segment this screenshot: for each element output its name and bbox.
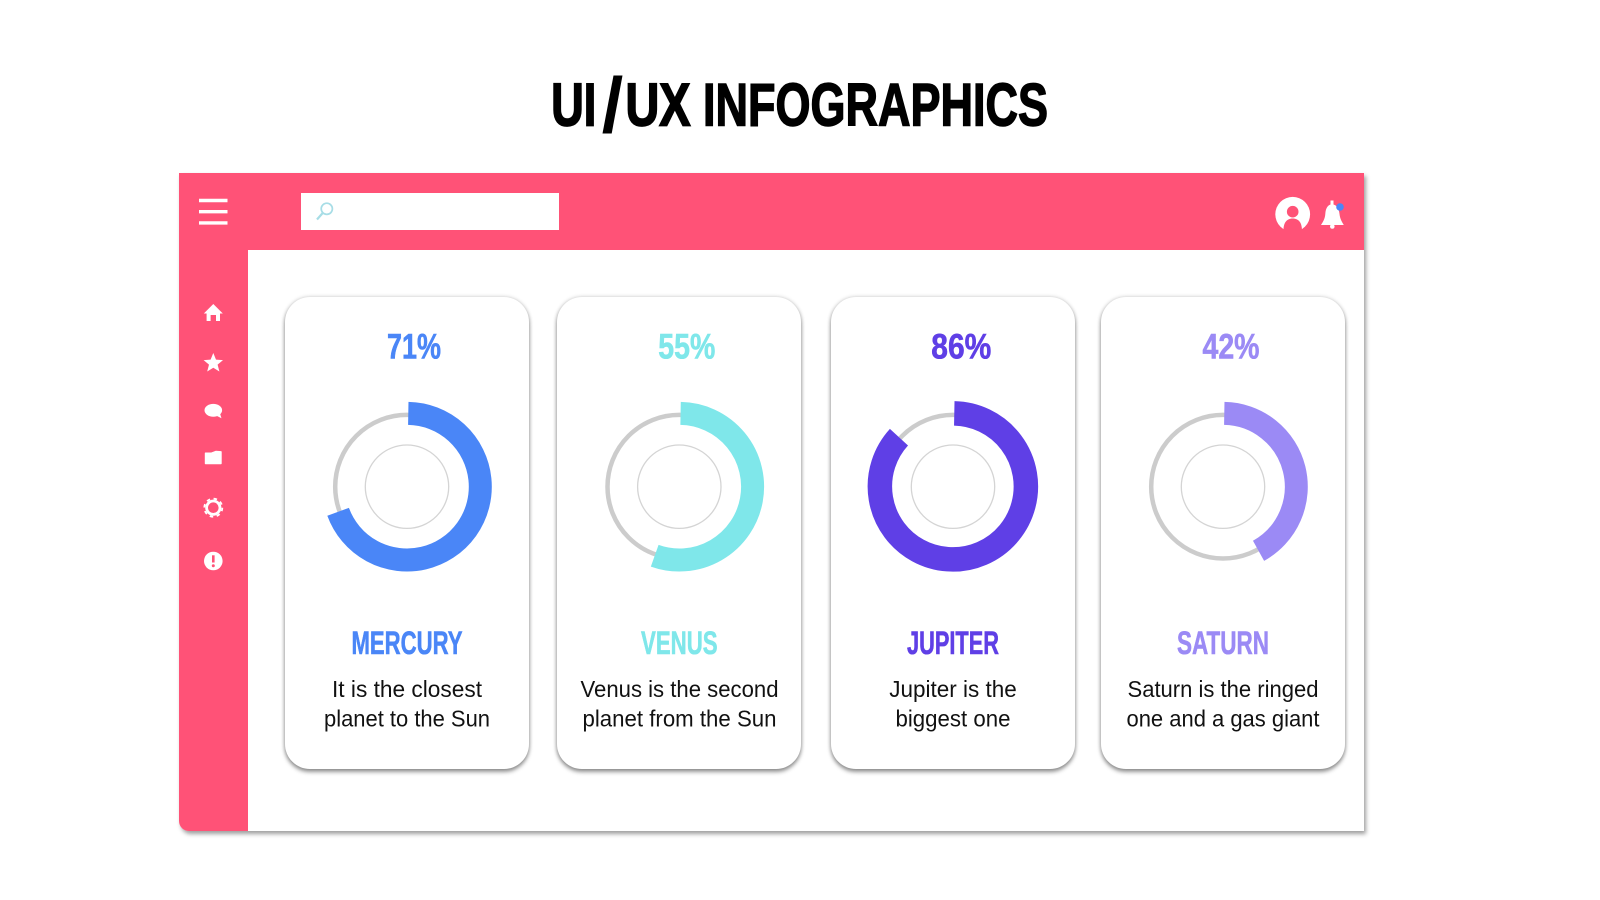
Saturn name: SATURN xyxy=(1177,625,1269,661)
Saturn description: Saturn is the ringed xyxy=(1128,676,1319,702)
Jupiter description: biggest one xyxy=(895,706,1010,732)
Saturn donut chart xyxy=(1151,413,1297,558)
search box xyxy=(301,193,558,230)
icon: settings xyxy=(203,498,224,518)
Mercury description xyxy=(324,676,490,732)
header bar xyxy=(178,173,1364,250)
icon: menu xyxy=(199,198,228,225)
icon: search xyxy=(316,202,334,220)
Mercury description: It is the closest xyxy=(332,676,482,702)
Venus description: planet from the Sun xyxy=(583,706,777,732)
Mercury percentage: 71% xyxy=(387,328,441,366)
Mercury donut chart xyxy=(335,413,480,560)
Saturn description xyxy=(1127,676,1320,732)
Venus description xyxy=(581,676,779,732)
panel: Saturn card xyxy=(1101,297,1345,768)
Mercury name: MERCURY xyxy=(351,625,462,661)
Venus description: Venus is the second xyxy=(581,676,779,702)
icon: home xyxy=(204,304,223,321)
Jupiter name: JUPITER xyxy=(907,625,999,661)
icon: folder xyxy=(204,450,222,464)
Jupiter donut chart xyxy=(880,413,1026,559)
panel: Mercury card xyxy=(285,297,529,768)
icon: chat xyxy=(204,404,222,418)
Venus percentage: 55% xyxy=(659,328,716,366)
panel: Venus card xyxy=(557,297,801,768)
title: UI xyxy=(551,72,596,139)
icon: user xyxy=(1275,196,1310,230)
icon: bell xyxy=(1321,200,1344,229)
title: UX xyxy=(626,72,690,139)
title xyxy=(551,70,1048,145)
icon: alert xyxy=(204,552,223,570)
sidebar xyxy=(178,173,248,830)
Venus name: VENUS xyxy=(641,625,718,661)
icon: star xyxy=(204,353,223,372)
panel: app window xyxy=(178,173,1364,830)
Jupiter description: Jupiter is the xyxy=(889,676,1017,702)
panel: Jupiter card xyxy=(831,297,1075,768)
Saturn description: one and a gas giant xyxy=(1127,706,1320,732)
Mercury description: planet to the Sun xyxy=(324,706,490,732)
Saturn percentage: 42% xyxy=(1203,328,1260,366)
Jupiter description xyxy=(889,676,1017,732)
Venus donut chart xyxy=(608,413,753,560)
Jupiter percentage: 86% xyxy=(931,328,991,366)
